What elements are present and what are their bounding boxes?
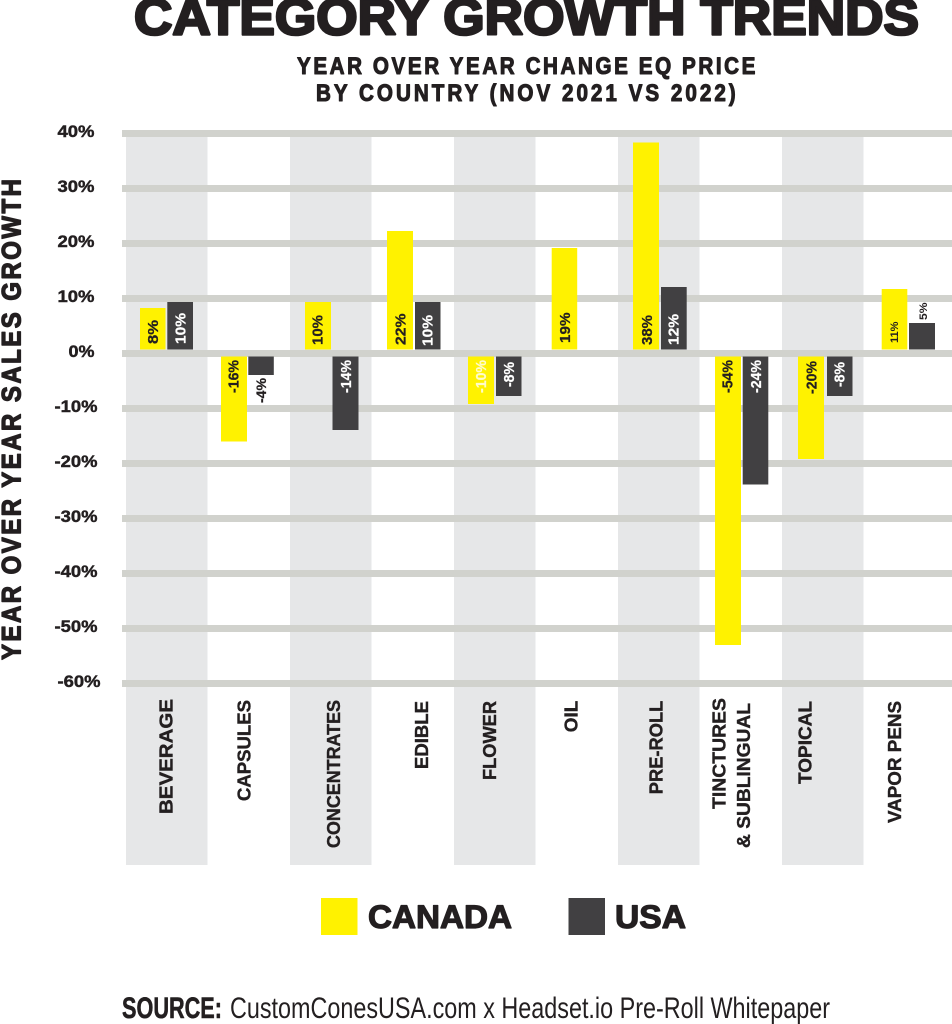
bars: pre-roll: 38% [639,315,656,345]
bars: oil: 19% [557,312,574,343]
y-axis labels [54,122,100,691]
bars: topical: -20% [804,361,820,394]
category labels: CAPSULES [234,700,255,801]
y-axis labels: -20% [54,452,98,471]
y-axis labels: 0% [68,342,94,361]
bars: beverage: 8% [145,320,162,344]
bars: tinctures and sublingual [715,356,768,645]
bars: beverage: 10% [172,313,190,344]
legend: usa [568,898,686,935]
bars: flower: -8% [501,362,518,387]
chart: category growth [54,122,952,865]
subtitle: BY COUNTRY (NOV 2021 VS 2022) [316,80,736,106]
bars: vapor pens [882,289,935,350]
category labels: PRE-ROLL [645,701,666,794]
category labels: VAPOR PENS [884,701,905,823]
bars: tinctures and sublingual: -54% [720,360,736,393]
bars: topical: -8% [832,362,848,387]
bars: concentrates: 10% [310,315,326,345]
bars: concentrates [305,302,358,430]
category labels: OIL [561,701,582,732]
bars: capsules [221,356,274,442]
category labels [155,698,905,848]
y-axis labels: -50% [54,617,98,636]
bars: capsules: -4% [253,377,269,403]
y-axis labels: 20% [58,232,94,251]
bars: edible: 10% [420,315,436,346]
bars: tinctures and sublingual: -24% [748,360,765,393]
bars: pre-roll: 12% [666,314,682,345]
bars: capsules: -16% [226,360,242,393]
category labels: TINCTURES [709,698,730,809]
bars: oil [552,248,577,350]
category labels: BEVERAGE [155,699,176,814]
bars: vapor pens: 11% [889,321,901,343]
bars: edible: 22% [392,314,410,345]
bars: concentrates: -14% [338,360,355,393]
category labels: EDIBLE [411,701,432,769]
legend: canada: CANADA [368,899,512,935]
subtitle [297,53,755,106]
category labels: TOPICAL [795,701,816,784]
bars: edible [387,231,440,350]
y-axis labels: -10% [54,397,98,416]
y-axis labels: -30% [54,507,98,526]
y-axis labels: -40% [54,562,98,581]
legend: usa: USA [615,899,686,935]
bars: pre-roll [633,142,687,350]
bars: topical [798,356,852,459]
subtitle: YEAR OVER YEAR CHANGE EQ PRICE [297,53,755,79]
category labels: FLOWER [479,701,500,780]
category background bands [126,137,864,865]
bars: flower [468,356,522,404]
y-axis labels: 30% [58,177,94,196]
y-axis labels: -60% [58,672,100,691]
category labels: & SUBLINGUAL [733,703,754,848]
bars: flower: -10% [473,360,490,393]
y-axis labels: 10% [58,287,94,306]
bars: vapor pens: 5% [918,302,930,320]
category labels: CONCENTRATES [323,700,344,848]
y-axis labels: 40% [58,122,94,141]
legend [321,898,686,935]
bars: beverage [140,302,193,350]
